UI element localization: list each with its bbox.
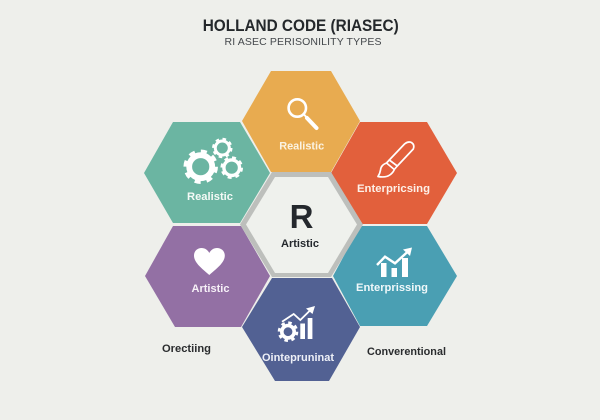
- label: Orectiing: Orectiing: [162, 343, 211, 355]
- panel: left teal hexagon: [144, 122, 270, 223]
- label: Converentional: Converentional: [367, 346, 446, 358]
- panel: right red hexagon: [331, 122, 457, 224]
- label: Enterprissing: Enterprissing: [356, 282, 428, 294]
- subtitle: RI ASEC PERISONILITY TYPES: [224, 36, 382, 48]
- label: Realistic: Realistic: [279, 140, 324, 152]
- label: Artistic: Artistic: [281, 238, 319, 250]
- title: HOLLAND CODE (RIASEC): [203, 16, 399, 35]
- icon: heart: [194, 248, 225, 275]
- icon: paintbrush: [378, 142, 414, 177]
- label: Artistic: Artistic: [192, 283, 230, 295]
- panel: center hexagon: [240, 172, 363, 277]
- label: Enterpricsing: Enterpricsing: [357, 183, 430, 195]
- label: Ointepruninat: Ointepruninat: [262, 352, 334, 364]
- icon: magnifying glass: [289, 99, 316, 128]
- panel: top orange hexagon: [242, 71, 360, 172]
- icon: gear with chart: [279, 306, 315, 341]
- icon: rising bar chart: [377, 248, 412, 277]
- icon: gears: [185, 139, 242, 182]
- panel: lower-left purple hexagon: [145, 226, 270, 327]
- label: Realistic: Realistic: [187, 191, 233, 203]
- letter R: R: [290, 198, 314, 235]
- panel: bottom navy hexagon: [242, 278, 360, 381]
- panel: lower-right teal-blue hexagon: [333, 226, 457, 326]
